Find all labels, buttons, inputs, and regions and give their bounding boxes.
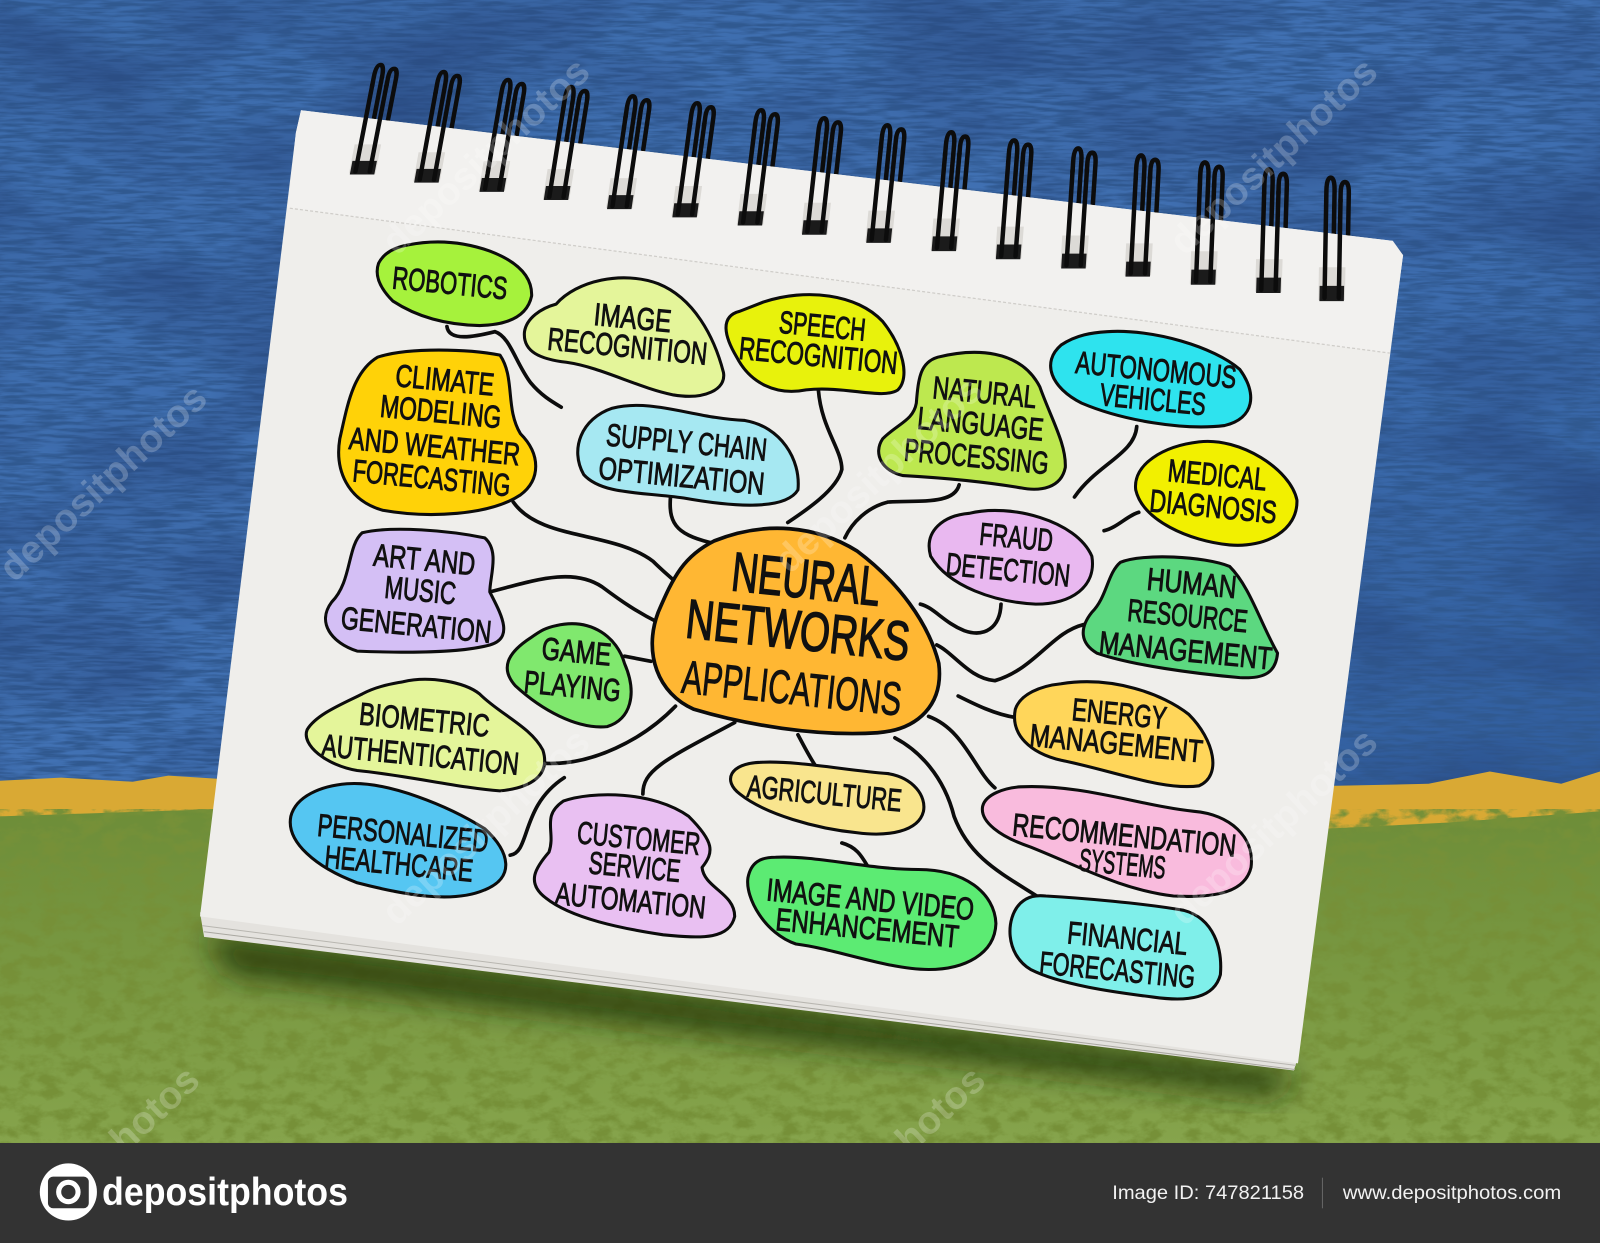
icon: camera: [40, 1163, 97, 1221]
bubble: image and video enhancement: ENHANCEMENT: [774, 901, 960, 955]
footer website: www.depositphotos.com: [1342, 1182, 1561, 1204]
bubble: recommendation systems: [982, 787, 1251, 896]
bubble: personalized healthcare: HEALTHCARE: [323, 839, 475, 889]
bubble: robotics: ROBOTICS: [391, 259, 509, 306]
footer bar: [0, 1143, 1600, 1243]
bubble: climate modeling and weather forecasting: MODELING: [379, 388, 503, 435]
bubble: customer service automation: CUSTOMER: [576, 814, 702, 862]
bubble: customer service automation: [534, 795, 735, 937]
footer logo: [40, 1163, 348, 1221]
bubble: climate modeling and weather forecasting: CLIMATE: [394, 357, 496, 403]
spiral rings: front strands and holes: [349, 84, 1347, 301]
central bubble: neural networks applications: NEURAL: [729, 540, 884, 618]
bubble: speech recognition: [726, 295, 904, 394]
bubble: autonomous vehicles: [1051, 331, 1251, 427]
bubble: autonomous vehicles: AUTONOMOUS: [1074, 344, 1238, 395]
bubble: medical diagnosis: [1136, 441, 1297, 545]
bubble: recommendation systems: RECOMMENDATION: [1011, 806, 1238, 864]
bubble: energy management: MANAGEMENT: [1028, 717, 1204, 769]
bubble: biometric authentication: AUTHENTICATION: [320, 727, 521, 782]
bubble: energy management: ENERGY: [1070, 691, 1168, 736]
bubble: fraud detection: [929, 510, 1092, 604]
watermarks: photos: [84, 1058, 208, 1178]
bubble: image and video enhancement: [748, 857, 996, 969]
bubble: art and music generation: MUSIC: [383, 569, 458, 611]
bubble: climate modeling and weather forecasting: [339, 350, 536, 514]
bubble: climate modeling and weather forecasting: AND WEATHER: [348, 420, 522, 472]
bubble: recommendation systems: SYSTEMS: [1078, 842, 1167, 886]
bubble: agriculture: AGRICULTURE: [746, 768, 903, 819]
bubble: art and music generation: GENERATION: [339, 600, 493, 650]
central bubble: neural networks applications: [652, 528, 939, 734]
bubble: human resource management: HUMAN: [1145, 561, 1238, 605]
central bubble: neural networks applications: APPLICATIONS: [679, 651, 904, 726]
bubble: game playing: [507, 624, 631, 727]
watermarks: depositphotos: [1161, 50, 1386, 263]
bubble: natural language processing: NATURAL: [931, 369, 1038, 415]
notebook shadow: [204, 934, 1296, 1097]
central bubble: neural networks applications: NETWORKS: [683, 587, 913, 673]
background: blue textured paper: [0, 0, 1600, 806]
connector lines of the mind map: [447, 327, 1139, 896]
bubble: natural language processing: [879, 352, 1065, 489]
background: orange torn paper strip: [0, 772, 1600, 829]
bubble: personalized healthcare: [290, 784, 506, 897]
bubble: human resource management: [1083, 557, 1278, 678]
bubble: natural language processing: PROCESSING: [903, 432, 1050, 481]
footer logo: depositphotos: [102, 1171, 348, 1214]
bubble: speech recognition: SPEECH: [778, 304, 867, 348]
bubble: financial forecasting: FINANCIAL: [1066, 914, 1189, 962]
bubble: human resource management: MANAGEMENT: [1098, 624, 1274, 677]
watermarks: depositphotos: [1161, 720, 1386, 934]
bubble: image recognition: RECOGNITION: [546, 321, 709, 372]
bubble: image recognition: [524, 278, 724, 396]
bubble: agriculture: [731, 762, 924, 834]
bubble: fraud detection: FRAUD: [978, 516, 1055, 558]
bubble: speech recognition: RECOGNITION: [737, 330, 899, 381]
bubble: art and music generation: [326, 529, 504, 652]
bubble: personalized healthcare: PERSONALIZED: [316, 807, 490, 859]
bubble: supply chain optimization: SUPPLY CHAIN: [605, 416, 769, 468]
bubble: customer service automation: SERVICE: [587, 844, 682, 889]
bubble: game playing: GAME: [540, 630, 613, 673]
watermarks: photos: [870, 1058, 994, 1178]
bubble: energy management: [1015, 682, 1213, 787]
bubble: human resource management: RESOURCE: [1126, 592, 1249, 639]
notebook page: [200, 110, 1403, 1071]
bubble: image and video enhancement: IMAGE AND VIDEO: [765, 871, 976, 927]
footer image id: Image ID: 747821158: [1112, 1182, 1304, 1204]
watermarks: [0, 50, 1386, 1178]
bubble: climate modeling and weather forecasting: FORECASTING: [351, 452, 512, 503]
bubble: supply chain optimization: [578, 405, 798, 505]
bubble: image recognition: IMAGE: [592, 296, 673, 339]
background: green textured paper: [0, 809, 1600, 1148]
bubble: financial forecasting: FORECASTING: [1038, 944, 1197, 995]
bubble: natural language processing: LANGUAGE: [916, 400, 1045, 448]
bubble: fraud detection: DETECTION: [944, 546, 1072, 594]
bubble: customer service automation: AUTOMATION: [554, 875, 707, 925]
bubble: medical diagnosis: MEDICAL: [1166, 452, 1268, 497]
bubble: biometric authentication: BIOMETRIC: [358, 696, 491, 744]
watermarks: depositphotos: [374, 720, 598, 934]
bubble: supply chain optimization: OPTIMIZATION: [597, 450, 766, 502]
bubble: biometric authentication: [306, 679, 545, 791]
bubble: game playing: PLAYING: [522, 663, 622, 709]
spiral rings: rear strands: [365, 65, 1349, 245]
bubble: robotics: [377, 242, 532, 326]
watermarks: depositphotos: [766, 368, 991, 582]
bubble: autonomous vehicles: VEHICLES: [1098, 376, 1208, 422]
bubble: art and music generation: ART AND: [372, 537, 477, 582]
bubble: medical diagnosis: DIAGNOSIS: [1148, 482, 1278, 530]
watermarks: depositphotos: [374, 50, 598, 263]
bubble: financial forecasting: [1010, 896, 1221, 999]
